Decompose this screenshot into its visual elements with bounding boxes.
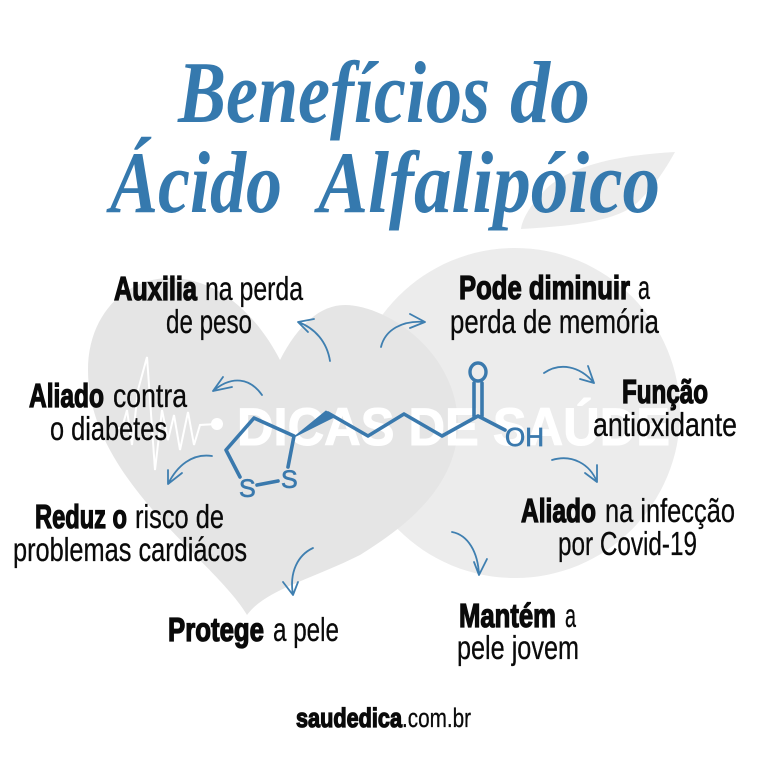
arrow to Aliado contra [213, 377, 262, 395]
arrow to Auxilia [298, 319, 330, 361]
title line 2: Alfalipóico [314, 135, 660, 232]
label: Pode diminuir: perda de memória [450, 303, 659, 340]
molecule: alpha-lipoic acid [226, 363, 544, 503]
footer website: .com.br [402, 703, 471, 733]
label: Aliado contra o diabetes: contra [113, 377, 188, 414]
label: Mantém a pele jovem: pele jovem [457, 629, 579, 666]
molecule: alpha-lipoic acid: OH [505, 422, 544, 452]
label: Aliado na infecção: por Covid-19 [558, 525, 697, 562]
label: Reduz o risco: problemas cardiácos [13, 531, 247, 568]
label: Função antioxidante: Função [622, 373, 708, 410]
label: Auxilia na perda de peso [114, 270, 303, 340]
title line 2: Ácido [106, 135, 282, 232]
label: Mantém a pele jovem [457, 597, 579, 666]
label: Reduz o risco: risco de [135, 498, 224, 535]
molecule: alpha-lipoic acid: S [239, 475, 256, 503]
footer website: saudedica [296, 703, 403, 733]
arrow to Aliado na infecção [552, 458, 597, 482]
label: Protege a pele: Protege [168, 611, 264, 648]
label: Função antioxidante [593, 373, 737, 443]
label: Aliado contra o diabetes: Aliado [29, 377, 104, 414]
label: Auxilia na perda de peso: de peso [166, 303, 252, 340]
molecule: alpha-lipoic acid: S [281, 466, 298, 494]
label: Aliado contra o diabetes: o diabetes [50, 410, 167, 447]
label: Aliado na infecção: Aliado [521, 492, 596, 529]
watermark text: DICAS DE SAÚDE [237, 397, 670, 457]
circle shape [350, 248, 680, 578]
label: Reduz o risco [13, 498, 247, 568]
label: Aliado contra o diabetes [29, 377, 188, 447]
arrow to Função [544, 366, 594, 383]
title line 2 [106, 135, 660, 232]
arrow to Protege [283, 548, 313, 595]
title [106, 45, 660, 232]
label: Pode diminuir [450, 269, 659, 340]
title line 1: Benefícios [177, 45, 490, 142]
label: Protege a pele: a pele [273, 611, 339, 648]
leaf shape [521, 152, 675, 229]
label: Auxilia na perda de peso: na perda [205, 270, 303, 307]
watermark background [88, 152, 680, 615]
label: Mantém a pele jovem: a [565, 597, 576, 634]
arrow to Pode diminuir [381, 314, 425, 347]
label: Pode diminuir: a [638, 269, 650, 306]
label: Mantém a pele jovem: Mantém [459, 597, 556, 634]
arrow to Mantém [452, 532, 487, 575]
label: Reduz o risco: Reduz o [35, 498, 127, 535]
label: Auxilia na perda de peso: Auxilia [114, 270, 197, 307]
label: Função antioxidante: antioxidante [593, 406, 737, 443]
heart shape [88, 278, 458, 615]
arrow to Reduz [168, 456, 212, 484]
title line 1: do [510, 45, 590, 142]
label: Pode diminuir: Pode diminuir [459, 269, 630, 306]
label: Aliado na infecção [521, 492, 735, 562]
heartbeat line [115, 357, 223, 470]
